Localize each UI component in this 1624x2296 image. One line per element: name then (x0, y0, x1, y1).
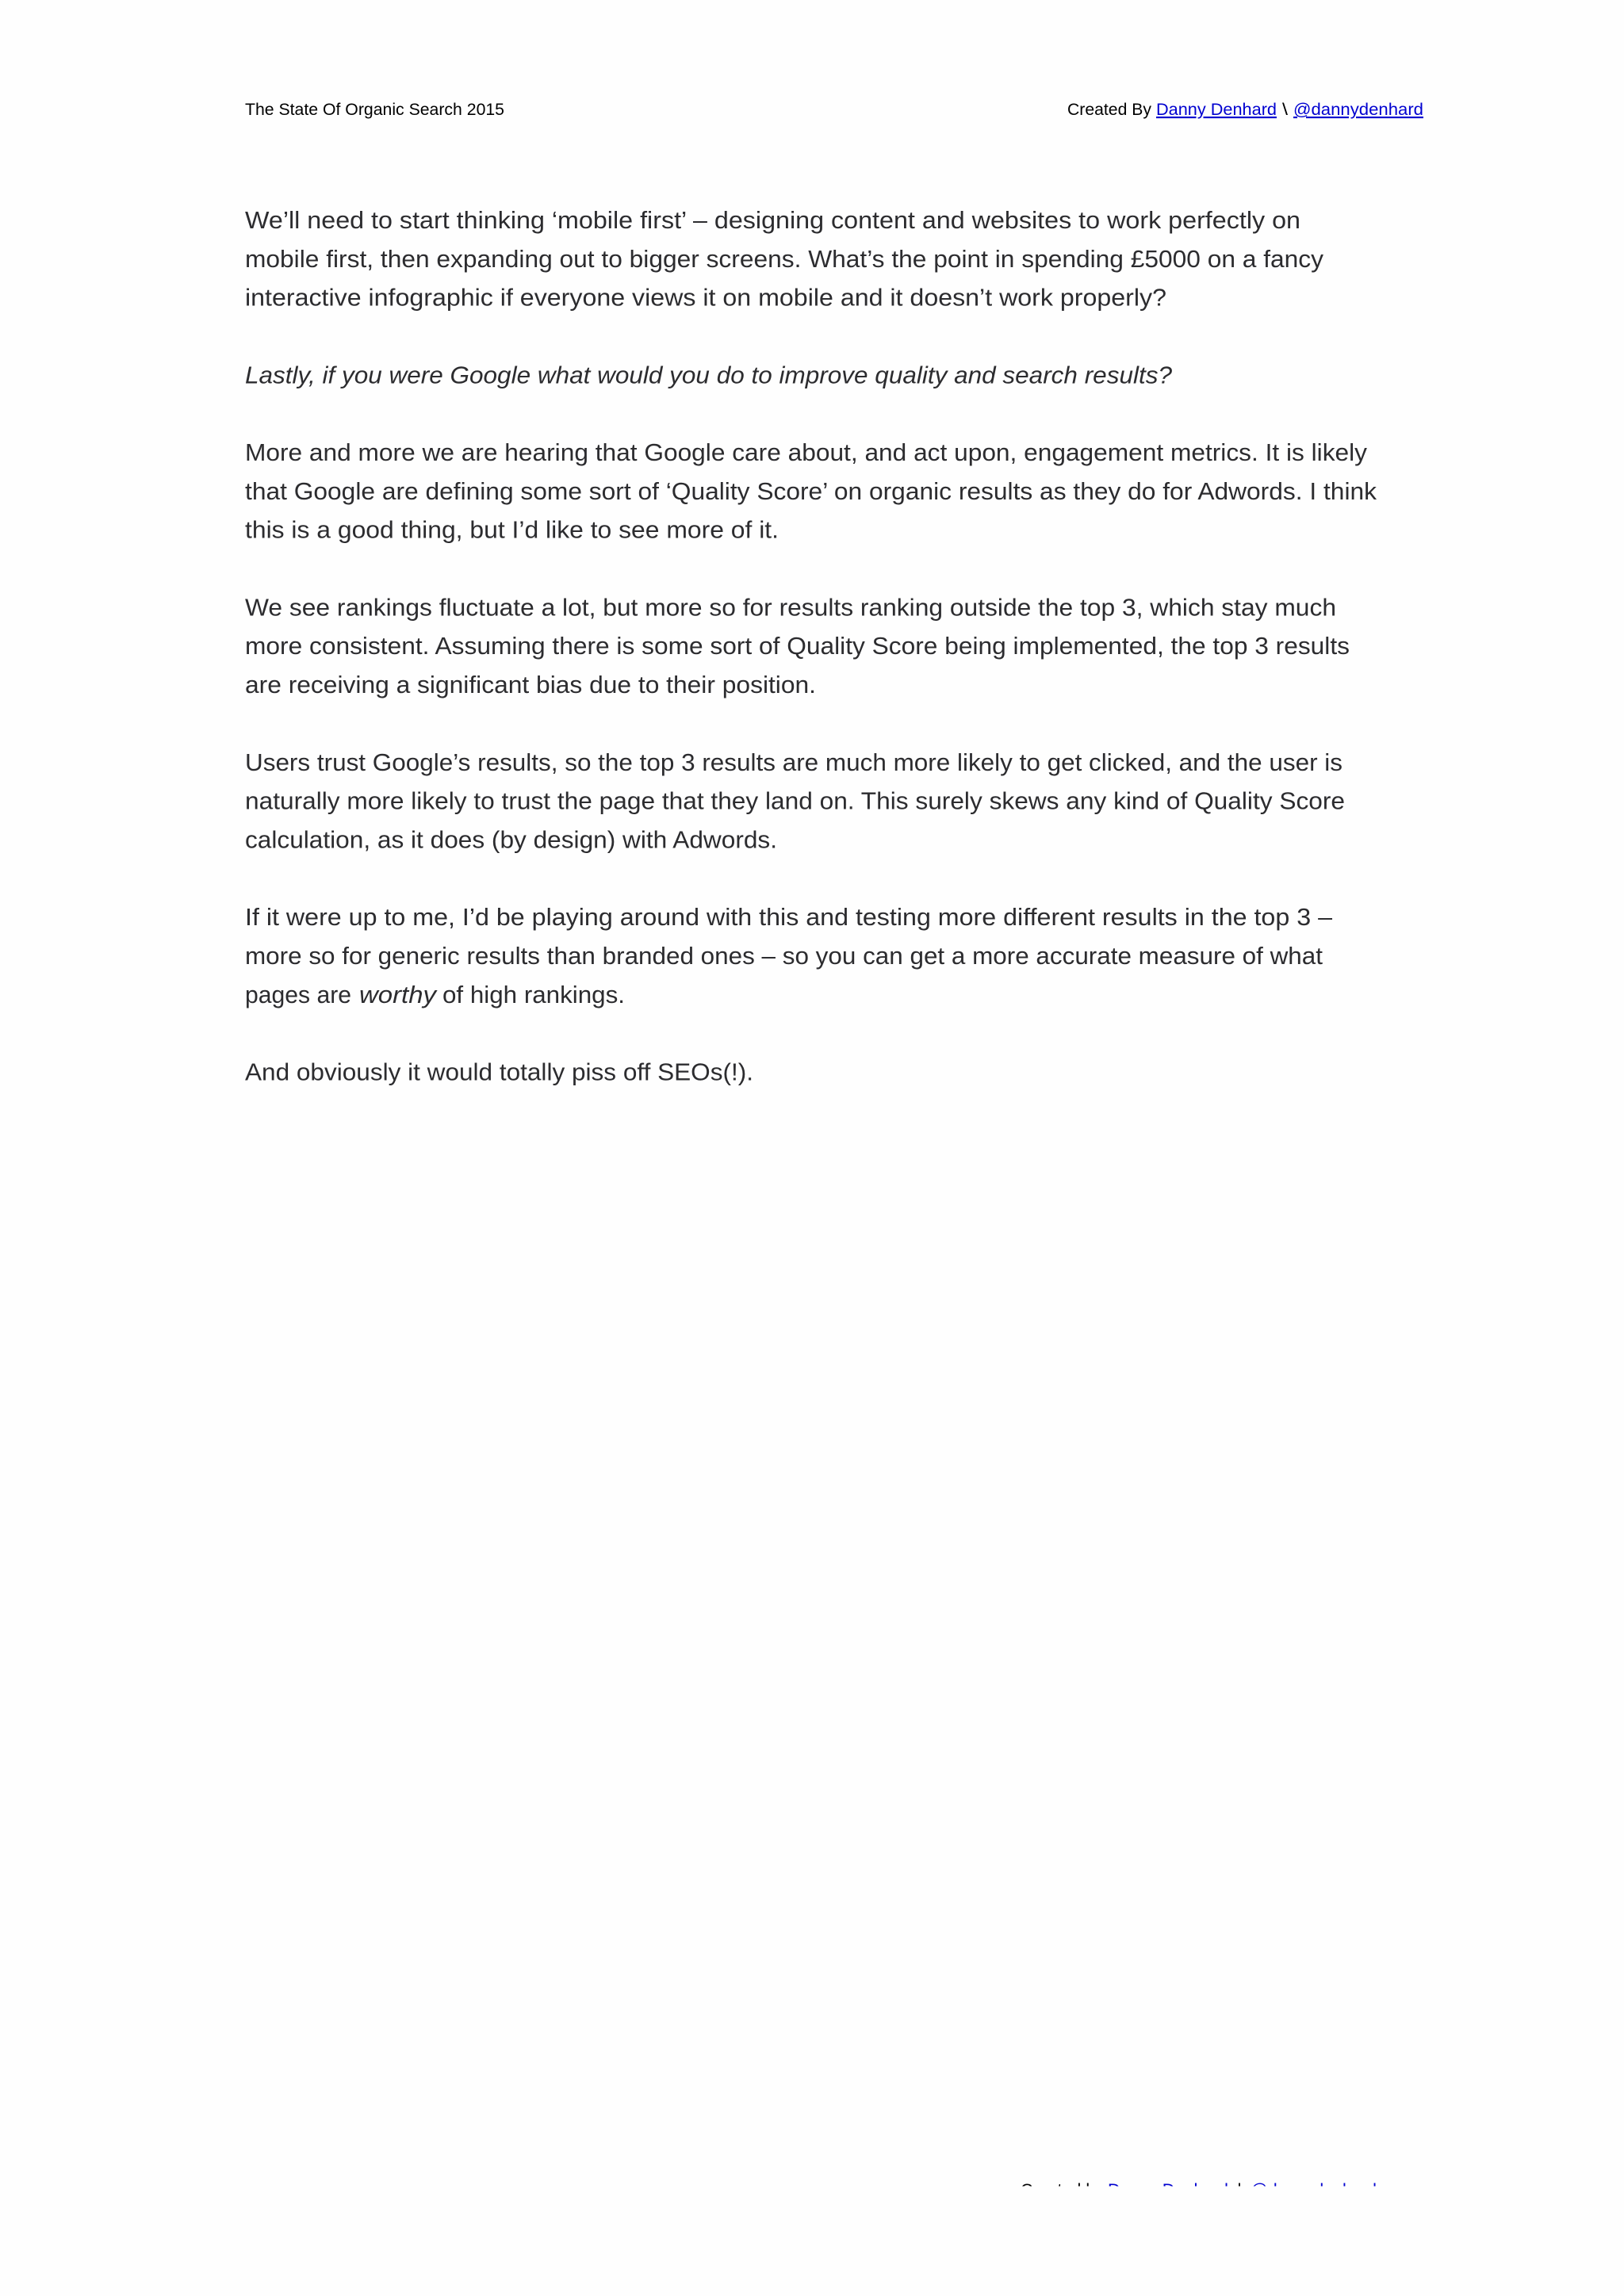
paragraph: engagement metrics (245, 439, 1377, 544)
header credit: \ (1282, 100, 1288, 119)
paragraph: rankings fluctuate: more consistent. Assuming there is some sort of Quality Score being implemented, the top 3 results (245, 633, 1350, 660)
paragraph: users trust: calculation, as it does (by design) with Adwords. (245, 826, 777, 853)
clipped footer credit: Danny Denhard (1108, 2180, 1228, 2199)
paragraph: if it were up to me: worthy (359, 982, 438, 1008)
closing line: And obviously it would totally piss off SEOs(!). (245, 1059, 753, 1086)
paragraph: mobile first: We’ll need to start thinking ‘mobile first’ – designing content and websites to work perfectly on (245, 207, 1300, 234)
paragraph: if it were up to me (245, 904, 1332, 1008)
paragraph: rankings fluctuate: We see rankings fluctuate a lot, but more so for results ranking outside the top 3, which stay much (245, 594, 1336, 621)
paragraph: if it were up to me: pages are (245, 982, 351, 1008)
question in italics: Lastly, if you were Google what would you do to improve quality and search results? (245, 362, 1172, 388)
paragraph: mobile first: mobile first, then expanding out to bigger screens. What’s the point in spending £5000 on a fancy (245, 246, 1324, 273)
paragraph: rankings fluctuate: are receiving a significant bias due to their position. (245, 672, 816, 698)
header credit: Danny Denhard (1156, 100, 1277, 119)
page header (245, 100, 1423, 119)
body text (245, 207, 1377, 1086)
clipped footer credit (1022, 2183, 1375, 2187)
paragraph: engagement metrics: that Google are defining some sort of ‘Quality Score’ on organic results as they do for Adwords. I think (245, 478, 1377, 505)
paragraph: users trust: Users trust Google’s results, so the top 3 results are much more likely to get clicked, and the user is (245, 749, 1342, 776)
paragraph: if it were up to me: more so for generic results than branded ones – so you can get a more accurate measure of what (245, 943, 1323, 970)
paragraph: mobile first (245, 207, 1324, 312)
header credit: @dannydenhard (1293, 100, 1423, 119)
paragraph: mobile first: interactive infographic if everyone views it on mobile and it doesn’t work properly? (245, 285, 1166, 312)
paragraph: users trust: naturally more likely to trust the page that they land on. This surely skews any kind of Quality Score (245, 788, 1345, 815)
paragraph: if it were up to me: of high rankings. (442, 982, 625, 1008)
header credit: Created By (1067, 100, 1151, 119)
clipped footer credit: @dannydenhard (1251, 2180, 1377, 2199)
header title: The State Of Organic Search 2015 (245, 100, 504, 119)
clipped footer credit: | (1237, 2180, 1242, 2199)
paragraph: rankings fluctuate (245, 594, 1350, 698)
clipped footer credit: Created by (1021, 2180, 1104, 2199)
paragraph: engagement metrics: this is a good thing, but I’d like to see more of it. (245, 517, 779, 544)
paragraph: if it were up to me: If it were up to me, I’d be playing around with this and testing more different results in the top 3 – (245, 904, 1332, 931)
header credit (1067, 100, 1423, 119)
paragraph: users trust (245, 749, 1345, 853)
paragraph: engagement metrics: More and more we are hearing that Google care about, and act upon, engagement metrics. It is likely (245, 439, 1368, 466)
